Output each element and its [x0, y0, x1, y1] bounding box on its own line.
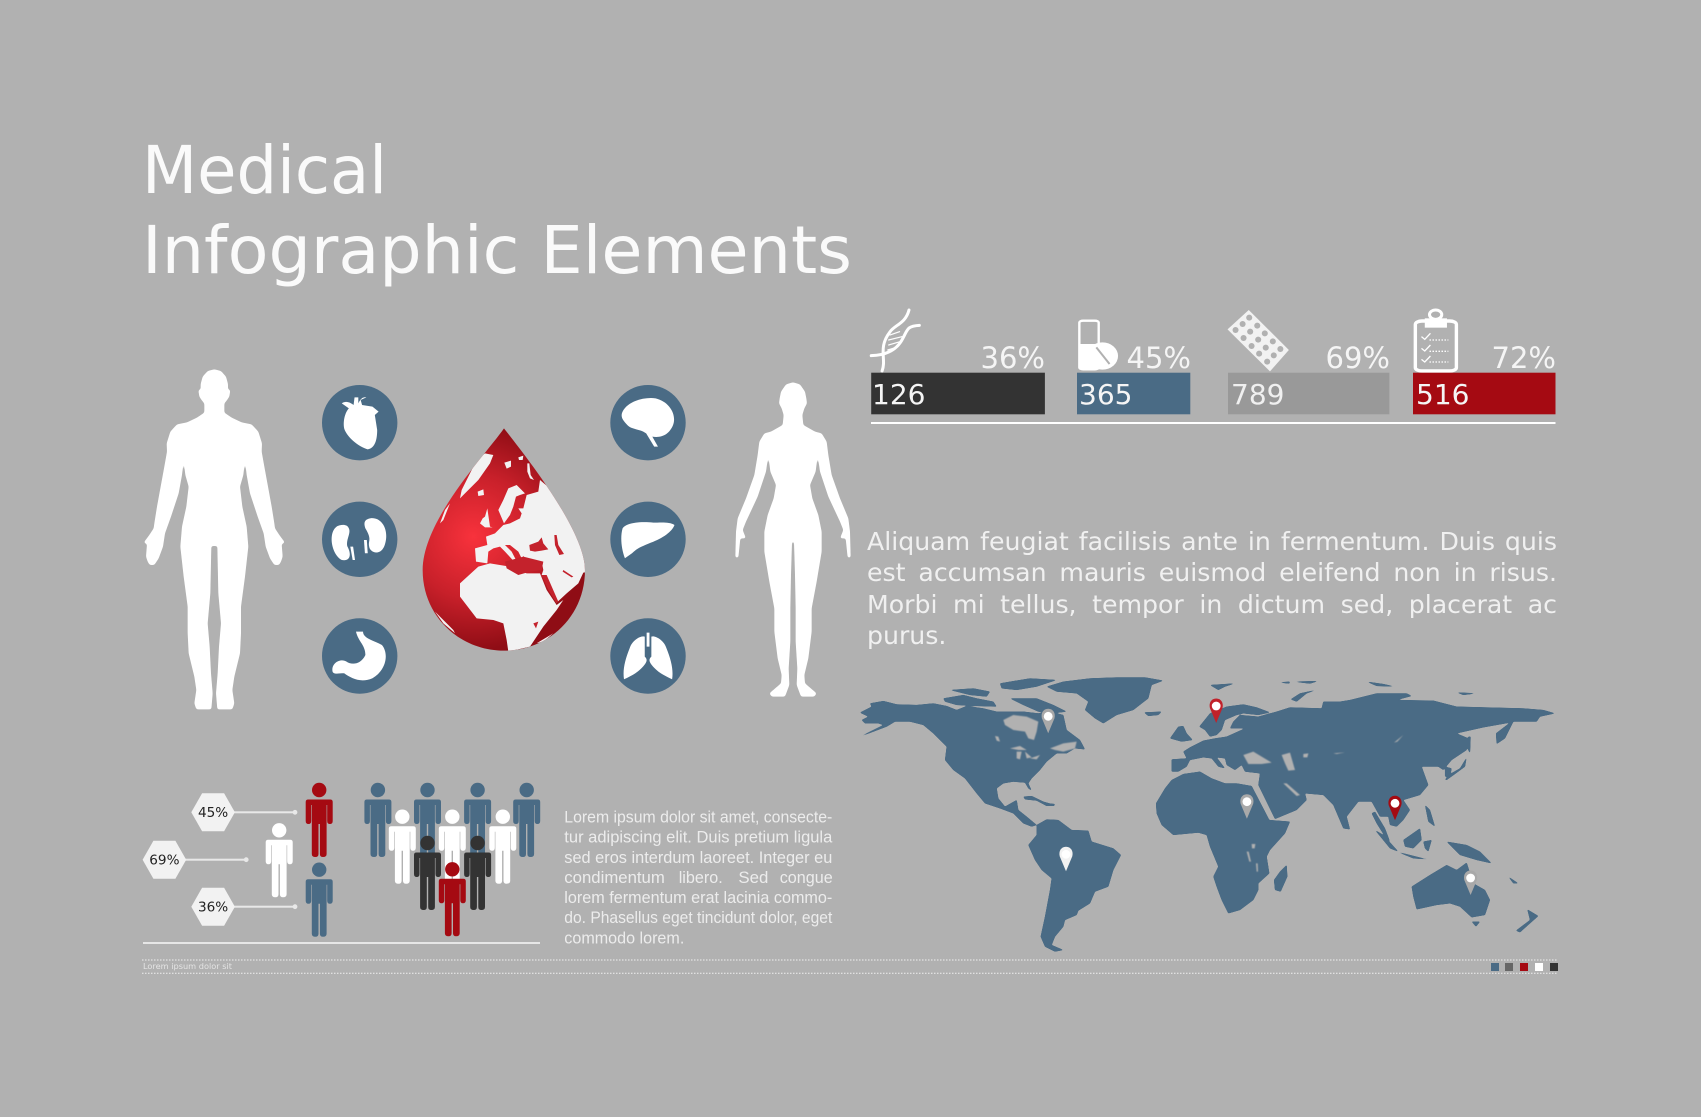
icon: stomach [322, 618, 397, 694]
three single people icons [266, 783, 333, 937]
map pin: Canada [1042, 709, 1055, 733]
icon: DNA helix [871, 310, 919, 371]
small paragraph: do. Phasellus eget tincidunt dolor, eget [564, 909, 833, 927]
title: Medical [142, 132, 387, 209]
hexagon 69% [143, 841, 249, 879]
main paragraph: purus. [867, 621, 946, 650]
hexagon 36%: 36% [198, 900, 228, 916]
North America [858, 677, 1163, 827]
title: Infographic Elements [142, 212, 852, 289]
main paragraph: Morbi mi tellus, tempor in dictum sed, placerat ac [867, 590, 1557, 619]
small paragraph [564, 809, 833, 947]
map pin: Sweden [1210, 698, 1223, 723]
bar: 365 / 45%: 45% [1127, 341, 1191, 375]
Africa [1156, 772, 1290, 913]
small paragraph: sed eros interdum laoreet. Integer eu [564, 849, 832, 867]
female body silhouette [735, 382, 851, 697]
Eurasia [1144, 681, 1555, 883]
icon: lungs [610, 618, 686, 694]
bar: 516 / 72% [1413, 341, 1556, 414]
bar: 516 / 72%: 72% [1492, 341, 1556, 375]
title [142, 132, 852, 289]
small paragraph: lorem fermentum erat lacinia commo- [564, 889, 832, 907]
bar: 789 / 69% [1228, 341, 1390, 414]
stat bars row [871, 310, 1556, 424]
hexagon 45%: 45% [198, 805, 228, 821]
hexagon 36% [191, 888, 297, 926]
bar: 365 / 45%: 365 [1079, 378, 1132, 411]
bar: 789 / 69%: 69% [1326, 341, 1390, 375]
icon: pill bottle [1079, 321, 1118, 370]
icon: kidneys [322, 502, 397, 577]
map pin: South America [1059, 847, 1073, 871]
icon: heart [322, 385, 397, 460]
map pin: Africa [1240, 794, 1253, 819]
bar: 365 / 45% [1077, 341, 1191, 414]
small paragraph: tur adipiscing elit. Duis pretium ligula [564, 829, 833, 847]
map pin: Australia [1464, 870, 1477, 895]
percentage callouts [143, 793, 297, 926]
small paragraph: commodo lorem. [564, 929, 684, 947]
icon: liver [610, 502, 686, 577]
icon: blister pack [1228, 310, 1289, 371]
small paragraph: Sed [738, 869, 768, 887]
blood drop globe [423, 428, 597, 652]
bar: 516 / 72%: 516 [1416, 378, 1469, 411]
bar: 126 / 36%: 36% [981, 341, 1045, 375]
icon: brain [610, 385, 686, 460]
footer strip: Lorem ipsum dolor sit [143, 962, 232, 971]
map pin: South East Asia [1388, 796, 1402, 820]
small paragraph: libero. [679, 869, 723, 887]
main paragraph: est accumsan mauris euismod eleifend non in risus. [867, 558, 1557, 587]
icon: clipboard [1415, 310, 1456, 371]
male body silhouette [144, 369, 285, 709]
hexagon 45% [191, 793, 297, 831]
footer strip [142, 960, 1558, 973]
small paragraph: condimentum [564, 869, 665, 887]
crowd of people pictogram [364, 783, 540, 936]
bar: 789 / 69%: 789 [1231, 378, 1284, 411]
small paragraph: Lorem ipsum dolor sit amet, consecte- [564, 809, 832, 827]
small paragraph: congue [780, 869, 833, 887]
bar: 126 / 36% [871, 341, 1045, 414]
world map [858, 677, 1555, 952]
colour swatches [1491, 963, 1558, 971]
bar: 126 / 36%: 126 [872, 378, 925, 411]
Australia and New Zealand [1412, 863, 1538, 932]
South America [1028, 819, 1121, 952]
main paragraph [867, 527, 1557, 650]
main paragraph: Aliquam feugiat facilisis ante in fermentum. Duis quis [867, 527, 1557, 556]
hexagon 69%: 69% [149, 852, 180, 868]
